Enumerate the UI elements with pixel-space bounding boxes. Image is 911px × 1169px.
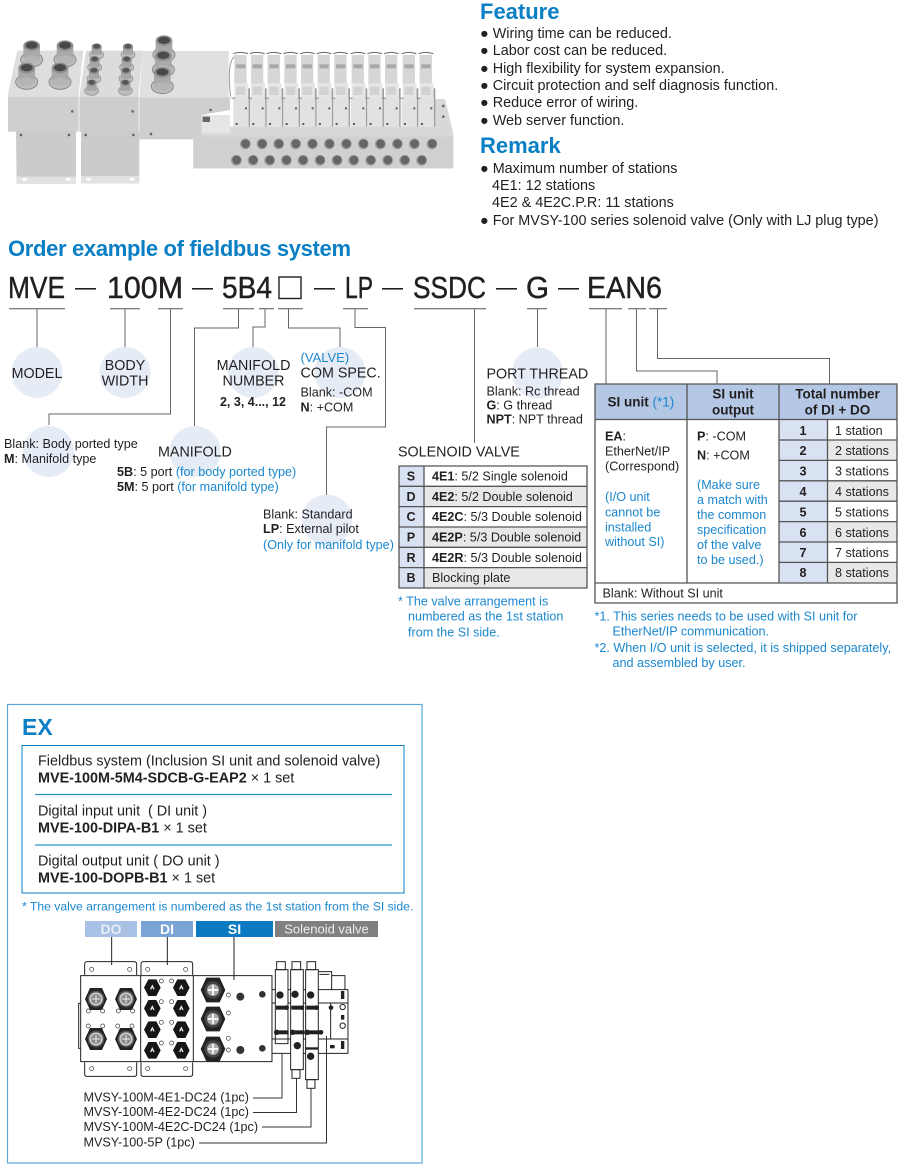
label: manifold: 5M: 5 port (for manifold type) (117, 480, 279, 494)
feature list: ● Wiring time can be reduced. (480, 26, 672, 42)
label: manifold number: NUMBER (223, 374, 284, 390)
order list box: MVE-100-DOPB-B1 × 1 set (38, 871, 215, 887)
station labels: 6 stations (835, 526, 889, 540)
remark list (480, 161, 878, 229)
label: external pilot: LP: External pilot (263, 522, 359, 536)
label: external pilot: (Only for manifold type) (263, 538, 394, 552)
table: solenoid valve: B (406, 571, 416, 585)
order example heading: Order example of fieldbus system (8, 236, 351, 261)
label: manifold number: MANIFOLD (217, 358, 290, 374)
order code row: EAN6 (587, 271, 662, 305)
station labels: 2 stations (835, 444, 889, 458)
order list box: Digital input unit ( DI unit ) (38, 804, 207, 820)
label: com spec (300, 350, 381, 415)
label: com spec: (VALVE) (300, 350, 349, 365)
label: port thread (486, 367, 588, 427)
table: SI unit (595, 384, 897, 603)
product photo: fieldbus manifold (7, 35, 453, 184)
table: solenoid valve: S (407, 470, 415, 484)
order list box (22, 746, 404, 893)
label: manifold (117, 445, 296, 494)
SI footnotes: EtherNet/IP communication. (612, 625, 769, 639)
table: solenoid valve: P (407, 530, 415, 544)
table: solenoid valve: C (406, 510, 416, 524)
legend tags: Solenoid valve (284, 922, 369, 936)
solenoid valve note: numbered as the 1st station (408, 610, 563, 624)
label: manifold: 5B: 5 port (for body ported type) (117, 465, 296, 479)
part list (84, 1091, 258, 1150)
solenoid valve heading: SOLENOID VALVE (398, 445, 520, 461)
table header: total number: of DI + DO (805, 403, 870, 418)
order code row: 5B4 (222, 271, 272, 305)
blank row: Blank: Without SI unit (602, 587, 723, 601)
remark list: 4E2 & 4E2C.P.R: 11 stations (492, 195, 674, 211)
label: external pilot (263, 508, 394, 552)
SI unit column: cannot be (605, 506, 660, 520)
SI unit column (604, 430, 679, 549)
station numbers: 5 (799, 506, 807, 520)
label: body width: BODY (105, 358, 146, 374)
label: model: MODEL (12, 366, 62, 382)
SI unit column: EtherNet/IP (605, 445, 670, 459)
label: port thread: NPT: NPT thread (486, 413, 583, 427)
part list: MVSY-100M-4E1-DC24 (1pc) (84, 1091, 249, 1105)
order code row: 100M (107, 271, 183, 305)
legend tags (85, 921, 378, 937)
SI output column: N: +COM (697, 449, 750, 463)
table: solenoid valve: 4E2C: 5/3 Double solenoid (432, 510, 582, 524)
order list box: Digital output unit ( DO unit ) (38, 854, 220, 870)
station labels: 4 stations (835, 485, 889, 499)
SI unit column: (Correspond) (605, 460, 679, 474)
connector lines (9, 309, 830, 495)
SI output column: P: -COM (697, 430, 746, 444)
part list: MVSY-100M-4E2-DC24 (1pc) (84, 1105, 249, 1119)
order code row: LP (345, 271, 373, 305)
part leader lines (199, 1036, 326, 1143)
SI footnotes: and assembled by user. (612, 656, 746, 670)
table: solenoid valve: Blocking plate (432, 571, 510, 585)
SI footnotes: *2. When I/O unit is selected, it is shipped separately, (594, 641, 891, 655)
SI unit column: EA: (605, 430, 626, 444)
feature list: ● High flexibility for system expansion. (480, 61, 725, 77)
table header: total number (795, 387, 880, 418)
part list: MVSY-100-5P (1pc) (84, 1136, 195, 1150)
EX heading: EX (22, 714, 53, 740)
feature list: ● Web server function. (480, 113, 624, 129)
station labels: 8 stations (835, 566, 889, 580)
station labels: 5 stations (835, 506, 889, 520)
label: com spec: Blank: -COM (300, 386, 373, 400)
EX note: * The valve arrangement is numbered as the 1st station from the SI side. (22, 900, 413, 914)
table header: SI unit output (712, 387, 754, 418)
label: port thread: Blank: Rc thread (486, 385, 580, 399)
feature list: ● Reduce error of wiring. (480, 95, 638, 111)
table: solenoid valve: R (406, 551, 416, 565)
table header: SI unit output: output (712, 403, 754, 418)
panel: EX (8, 704, 422, 1163)
SI footnotes: *1. This series needs to be used with SI unit for (594, 610, 857, 624)
station numbers: 3 (799, 464, 807, 478)
table header: SI unit: SI unit (*1) (608, 395, 674, 410)
SI output column (697, 430, 768, 567)
order list box: MVE-100-DIPA-B1 × 1 set (38, 821, 207, 837)
station numbers: 8 (799, 566, 807, 580)
SI output column: a match with (697, 493, 768, 507)
SI output column: the common (697, 508, 766, 522)
legend tags: DI (160, 921, 174, 937)
station labels (835, 424, 889, 580)
feature list: ● Circuit protection and self diagnosis function. (480, 78, 778, 94)
station numbers: 1 (799, 424, 807, 438)
remark list: 4E1: 12 stations (492, 178, 595, 194)
remark heading: Remark (480, 133, 561, 158)
SI output column: to be used.) (697, 553, 764, 567)
solenoid valve note (398, 595, 563, 640)
SI unit column: installed (605, 520, 651, 534)
order code row: G (526, 271, 549, 305)
label: manifold: MANIFOLD (158, 445, 232, 461)
table header: SI unit output: SI unit (712, 387, 754, 402)
solenoid valve note: * The valve arrangement is (398, 595, 548, 609)
station numbers: 2 (799, 444, 807, 458)
label: port thread: PORT THREAD (486, 367, 588, 383)
label: body type: Blank: Body ported type (4, 437, 138, 451)
label: external pilot: Blank: Standard (263, 508, 353, 522)
label: port thread: G: G thread (486, 399, 552, 413)
legend tags: DO (100, 921, 122, 937)
station numbers (799, 424, 807, 580)
order code row: MVE (8, 271, 65, 305)
unit drawing (79, 937, 348, 1088)
SI footnotes (594, 610, 891, 670)
order code row: SSDC (413, 271, 486, 305)
SI unit column: without SI) (604, 535, 664, 549)
table: solenoid valve: 4E2P: 5/3 Double solenoid (432, 530, 581, 544)
remark list: ● For MVSY-100 series solenoid valve (Only with LJ plug type) (480, 213, 878, 229)
SI output column: of the valve (697, 538, 761, 552)
table header: total number: Total number (795, 387, 880, 402)
label: manifold number (217, 358, 290, 409)
feature list (480, 26, 778, 129)
station labels: 3 stations (835, 464, 889, 478)
label: body width: WIDTH (102, 374, 148, 390)
table: solenoid valve: 4E1: 5/2 Single solenoid (432, 470, 568, 484)
order code row (8, 271, 662, 305)
feature section (480, 0, 778, 129)
station numbers: 7 (799, 546, 807, 560)
station numbers: 4 (799, 485, 807, 499)
label: body type (4, 437, 138, 466)
legend tags: SI (228, 921, 241, 937)
table: solenoid valve (399, 466, 587, 588)
remark section (480, 133, 878, 229)
part list: MVSY-100M-4E2C-DC24 (1pc) (84, 1120, 258, 1134)
label: com spec: N: +COM (300, 401, 353, 415)
SI output column: specification (697, 523, 766, 537)
order list box: Fieldbus system (Inclusion SI unit and solenoid valve) (38, 754, 380, 770)
remark list: ● Maximum number of stations (480, 161, 677, 177)
feature list: ● Labor cost can be reduced. (480, 43, 667, 59)
solenoid valve note: from the SI side. (408, 626, 500, 640)
table: solenoid valve: 4E2R: 5/3 Double solenoid (432, 551, 582, 565)
label: body type: M: Manifold type (4, 452, 96, 466)
order list box: MVE-100M-5M4-SDCB-G-EAP2 × 1 set (38, 771, 294, 787)
station labels: 7 stations (835, 546, 889, 560)
station numbers: 6 (799, 526, 807, 540)
label circles (12, 347, 563, 546)
table: solenoid valve: 4E2: 5/2 Double solenoid (432, 490, 573, 504)
SI unit column: (I/O unit (605, 490, 650, 504)
station labels: 1 station (835, 424, 883, 438)
label: body width (102, 358, 148, 390)
SI output column: (Make sure (697, 478, 760, 492)
label: manifold number: 2, 3, 4..., 12 (220, 395, 286, 409)
label: com spec: COM SPEC. (300, 366, 381, 382)
table: solenoid valve: D (406, 490, 416, 504)
